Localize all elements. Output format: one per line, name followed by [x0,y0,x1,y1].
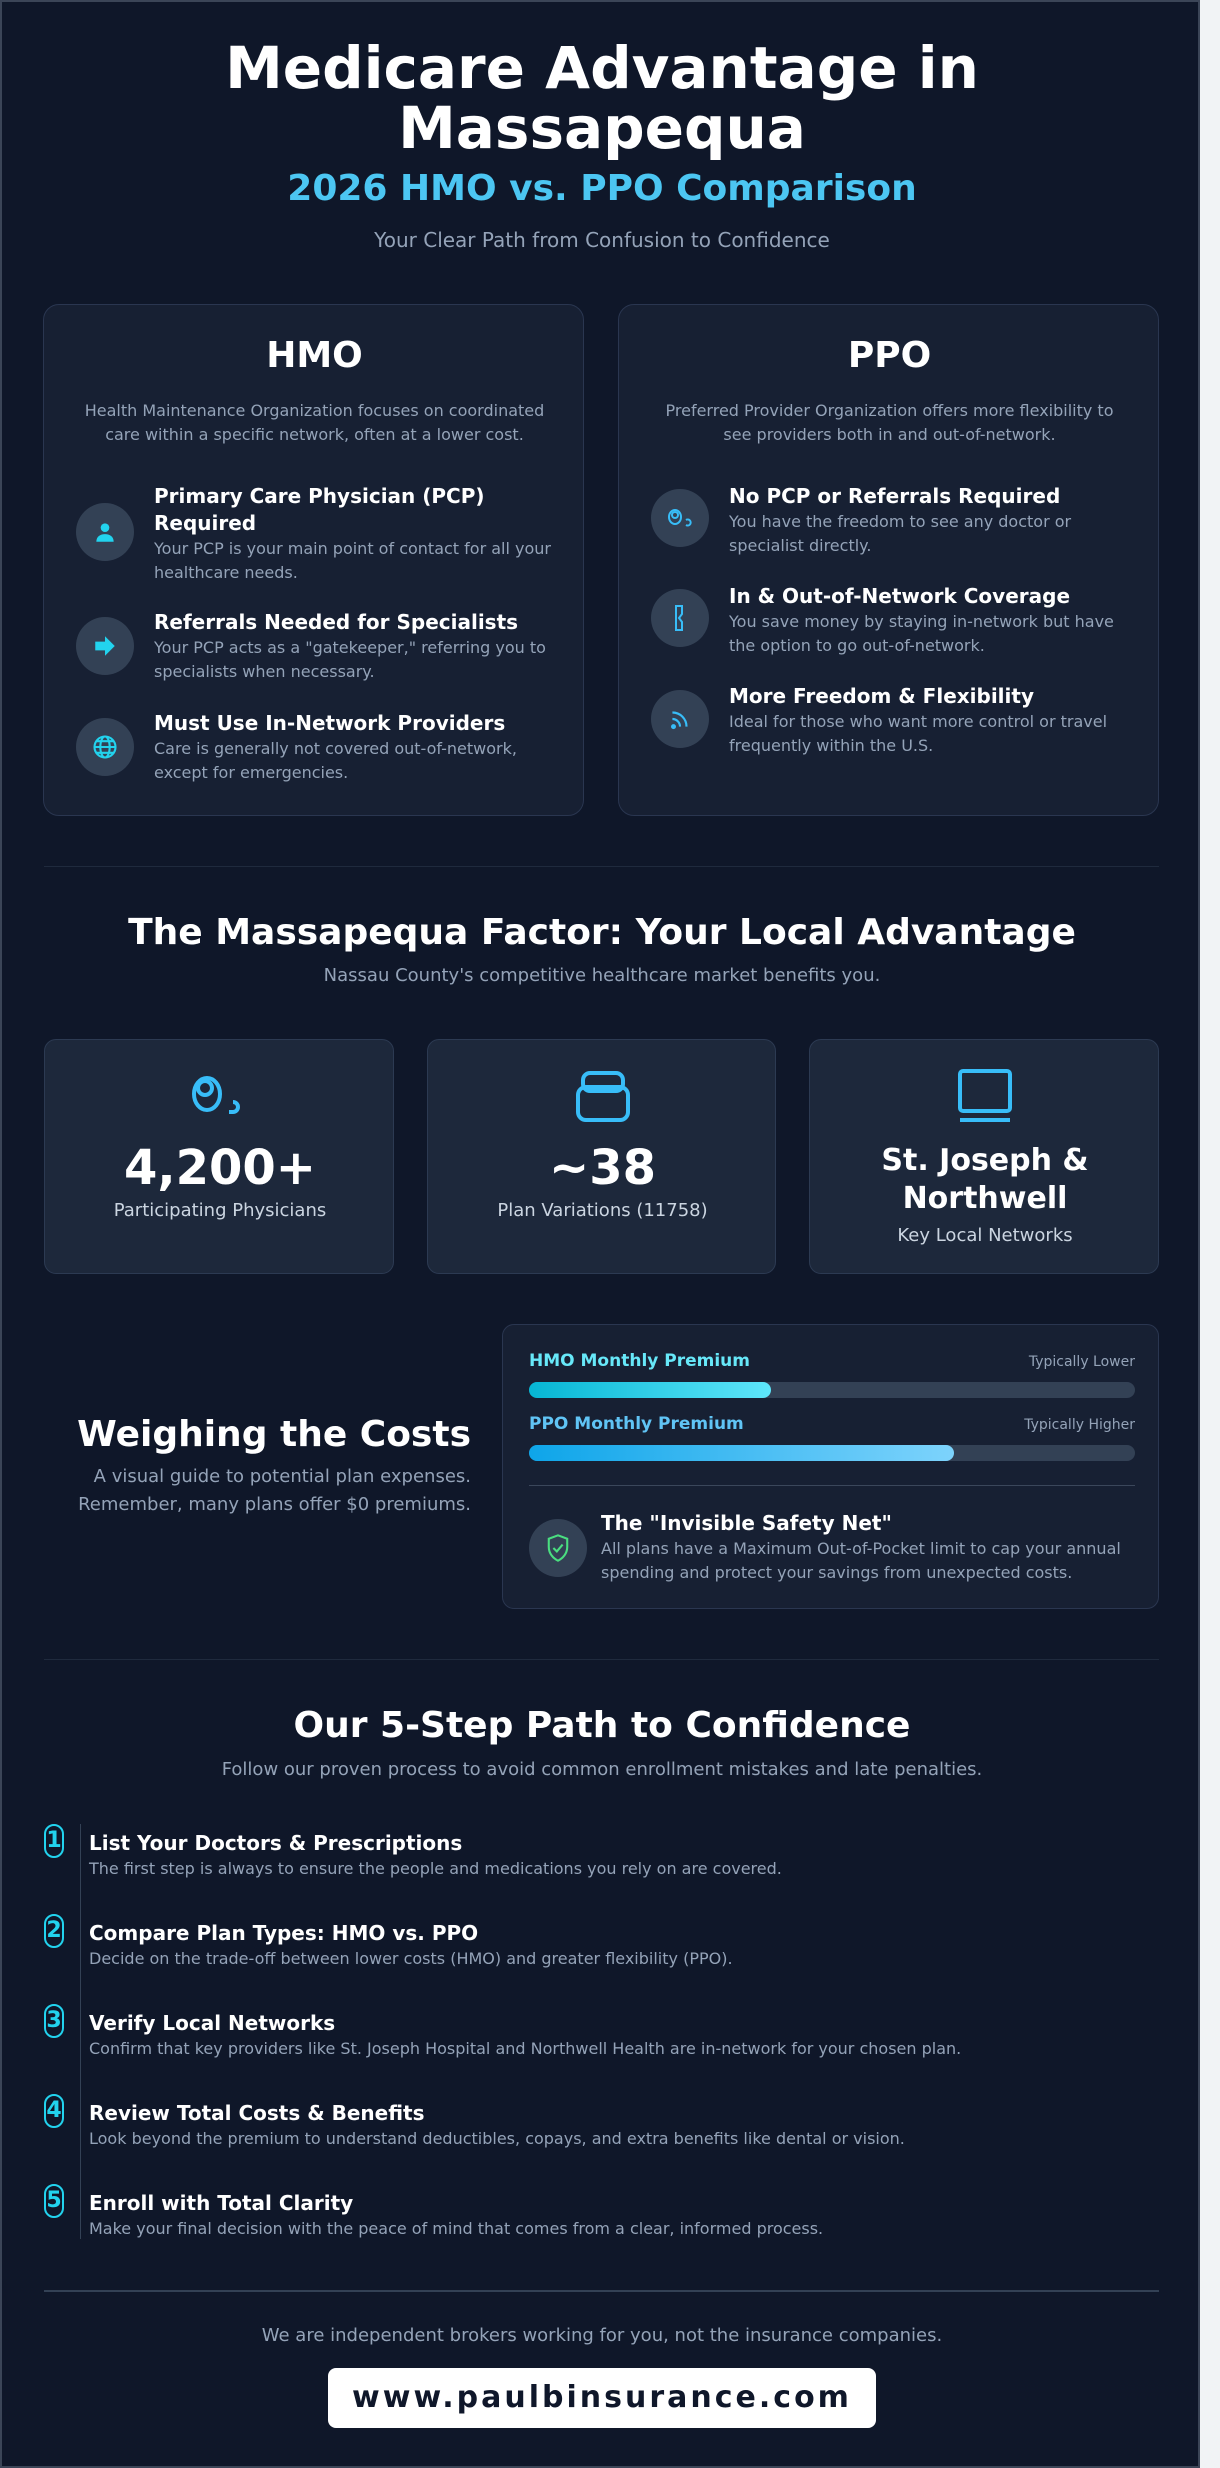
callout: safety net: All plans have a Maximum Out-of-Pocket limit to cap your annual spending and protect your savings from unexpected costs. [601,1539,1121,1582]
network names [881,1143,1089,1216]
step 4: 4 [46,2098,62,2123]
step 3: 3 [46,2008,62,2033]
item: in-network [154,711,517,782]
icon: box [576,1071,630,1122]
heading: weighing the costs: Remember, many plans offer $0 premiums. [78,1494,471,1515]
bar chart: HMO: HMO Monthly Premium [529,1351,750,1371]
item: freedom: More Freedom & Flexibility [729,684,1034,708]
item: no PCP [729,484,1072,555]
stat card: networks [809,1039,1159,1274]
bar chart: PPO: Typically Higher [1024,1417,1135,1433]
item: freedom: Ideal for those who want more control or travel frequently within the U.S. [729,712,1107,755]
step 2 [44,1914,733,1968]
item: no PCP: You have the freedom to see any doctor or specialist directly. [729,512,1071,555]
panel: HMO [43,304,584,816]
step 4: Look beyond the premium to understand deductibles, copays, and extra benefits like dental or vision. [89,2129,905,2148]
step 1: List Your Doctors & Prescriptions [89,1831,462,1855]
heading: weighing the costs: Weighing the Costs [77,1414,471,1455]
step 4: Review Total Costs & Benefits [89,2101,425,2125]
item: PCP required: Primary Care Physician (PCP) Required [154,484,485,535]
heading: 5-step path: Our 5-Step Path to Confidence [294,1705,910,1746]
step 2: Compare Plan Types: HMO vs. PPO [89,1921,478,1945]
item: in & out network: In & Out-of-Network Coverage [729,584,1070,608]
heading: weighing the costs [77,1414,471,1515]
item: in & out network: You save money by staying in-network but have the option to go out-of-network. [729,612,1114,655]
icon: signal [651,690,709,748]
title: Medicare Advantage in [225,34,979,102]
item: PCP required [154,484,551,582]
icon: network [651,589,709,647]
icon: laptop [958,1069,1012,1122]
panel: PPO [618,304,1159,816]
HMO description: Health Maintenance Organization focuses on coordinated care within a specific network, often at a lower cost. [85,401,544,444]
item: referrals [154,610,546,681]
step 1 [44,1824,782,1878]
PPO description: Preferred Provider Organization offers more flexibility to see providers both in and out-of-network. [666,401,1113,444]
heading: Massapequa factor: The Massapequa Factor: Your Local Advantage [128,912,1076,953]
title [225,34,979,162]
step 5: Make your final decision with the peace of mind that comes from a clear, informed process. [89,2219,823,2238]
bar chart: HMO [529,1351,1135,1398]
tagline: Your Clear Path from Confusion to Confidence [374,228,830,252]
icon: shield [529,1519,587,1577]
bar chart: PPO: PPO Monthly Premium [529,1414,744,1434]
step 2: Decide on the trade-off between lower costs (HMO) and greater flexibility (PPO). [89,1949,733,1968]
website button: www.paulbinsurance.com [352,2380,852,2415]
callout: safety net [601,1511,1121,1582]
panel: cost bars [502,1324,1159,1609]
item: referrals: Your PCP acts as a "gatekeeper," referring you to specialists when necessary. [154,638,546,681]
number: ~38 [549,1140,656,1196]
step 5: Enroll with Total Clarity [89,2191,353,2215]
step 5: 5 [46,2188,62,2213]
item: freedom [729,684,1107,755]
subheading: Nassau County's competitive healthcare market benefits you. [324,965,880,986]
steps list [44,1824,961,2239]
step 5 [44,2184,823,2238]
icon: arrow [76,617,134,675]
stat card: physicians [44,1039,394,1274]
icon: globe [76,718,134,776]
number: 4,200+ [124,1140,316,1196]
stat card: plans: Plan Variations (11758) [497,1200,708,1221]
footer text: We are independent brokers working for you, not the insurance companies. [262,2325,942,2346]
icon: stethoscope [192,1076,240,1114]
subtitle: 2026 HMO vs. PPO Comparison [287,168,917,209]
item: in-network: Care is generally not covered out-of-network, except for emergencies. [154,739,517,782]
stat card: networks: Key Local Networks [897,1225,1073,1246]
step 3 [44,2004,961,2058]
title: Massapequa [398,94,806,162]
stat card: physicians: Participating Physicians [114,1200,326,1221]
bar chart: HMO: Typically Lower [1029,1354,1135,1370]
item: no PCP: No PCP or Referrals Required [729,484,1060,508]
stat card: plans [427,1039,776,1274]
bar chart: PPO [529,1414,1135,1461]
heading: weighing the costs: A visual guide to potential plan expenses. [94,1466,471,1487]
icon: person [76,503,134,561]
network names: St. Joseph & [881,1143,1089,1178]
website button [328,2368,876,2428]
step 3: Confirm that key providers like St. Joseph Hospital and Northwell Health are in-network for your chosen plan. [89,2039,961,2058]
item: in & out network [729,584,1114,655]
icon: stethoscope [651,489,709,547]
callout: safety net: The "Invisible Safety Net" [601,1511,892,1535]
step 1: The first step is always to ensure the people and medications you rely on are covered. [89,1859,782,1878]
HMO heading: HMO [266,335,363,376]
item: referrals: Referrals Needed for Specialists [154,610,518,634]
item: PCP required: Your PCP is your main point of contact for all your healthcare needs. [154,539,551,582]
item: in-network: Must Use In-Network Providers [154,711,505,735]
network names: Northwell [903,1181,1067,1216]
PPO heading: PPO [848,335,931,376]
subheading: Follow our proven process to avoid common enrollment mistakes and late penalties. [222,1759,982,1780]
step 2: 2 [46,1918,62,1943]
step 4 [44,2094,905,2148]
step 3: Verify Local Networks [89,2011,335,2035]
step 1: 1 [46,1828,62,1853]
